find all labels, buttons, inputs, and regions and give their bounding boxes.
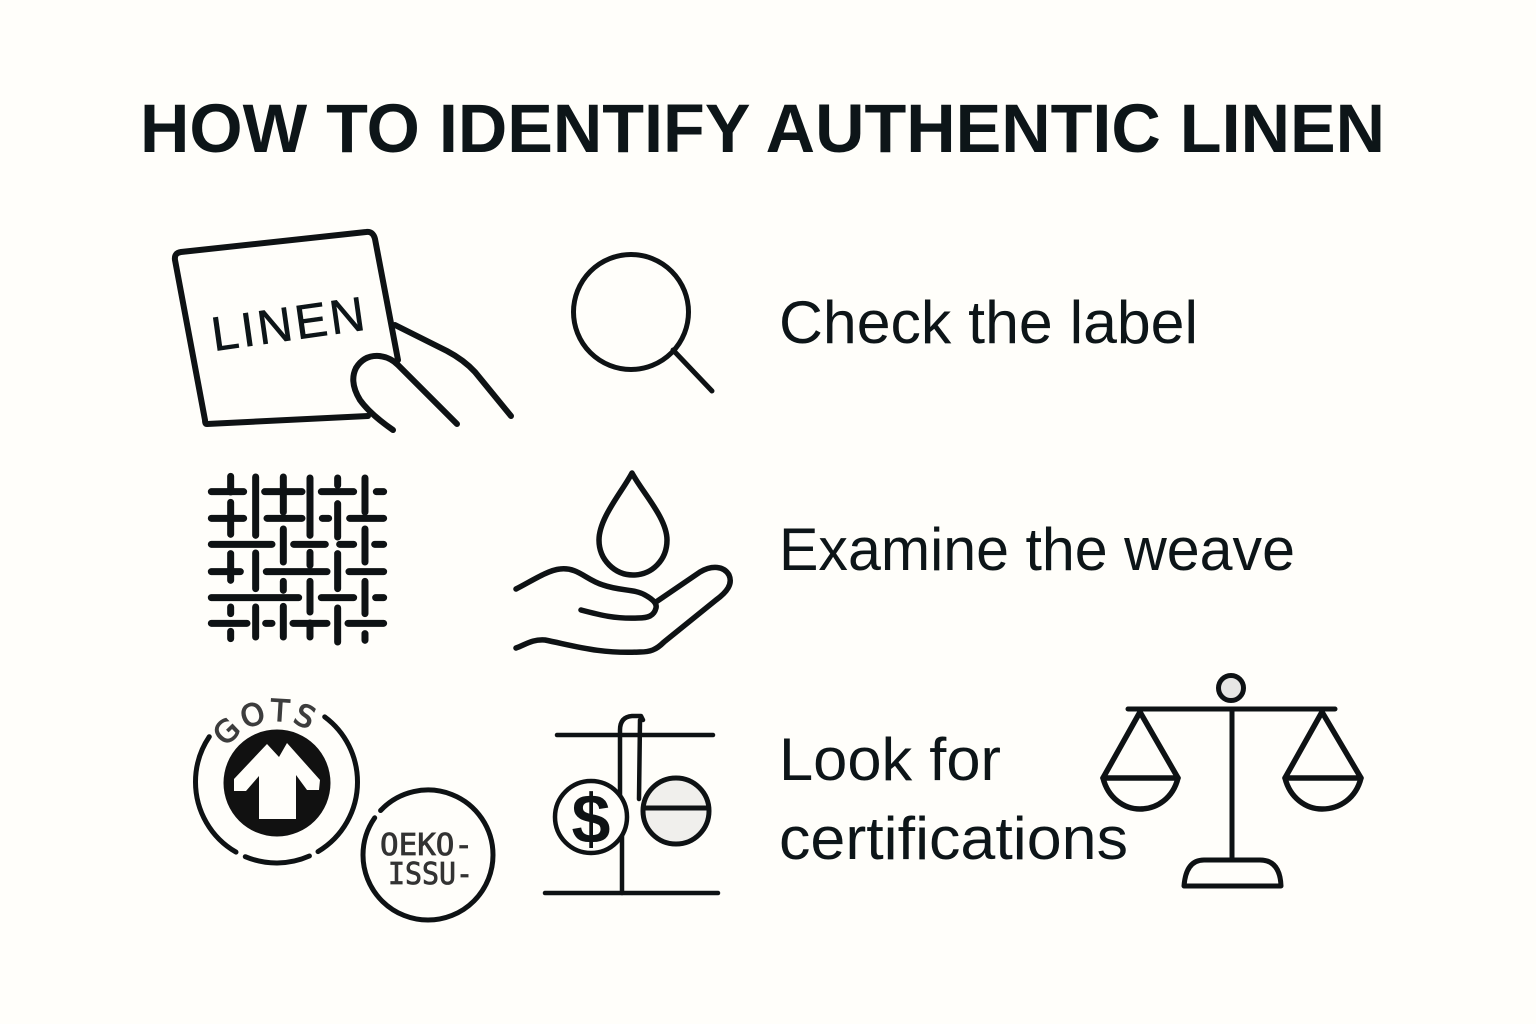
icon: OEKO certification badge <box>363 790 493 920</box>
icon: hand holding linen label: LINEN <box>208 288 368 362</box>
icon: hand with water drop <box>516 473 730 652</box>
label: check the label: Check the label <box>779 289 1198 356</box>
label: look for certifications: Look for <box>779 726 1001 793</box>
icon: linen weave <box>211 476 384 642</box>
icon: balance with coin and weight: $ <box>572 780 610 858</box>
icon: OEKO certification badge: ISSU- <box>388 857 473 892</box>
icon: scales of justice <box>1103 676 1361 886</box>
icon: hand holding linen label <box>175 232 511 430</box>
icon: balance with coin and weight <box>545 716 718 893</box>
label: look for certifications: certifications <box>779 805 1128 872</box>
icon: GOTS certification badge <box>193 698 360 866</box>
label: look for certifications <box>779 726 1128 872</box>
icon: GOTS certification badge: GOTS <box>214 698 316 743</box>
icon: magnifying glass <box>574 254 712 391</box>
title: HOW TO IDENTIFY AUTHENTIC LINEN <box>140 90 1385 167</box>
icon: OEKO certification badge: OEKO- <box>380 828 473 863</box>
label: examine the weave: Examine the weave <box>779 516 1295 583</box>
